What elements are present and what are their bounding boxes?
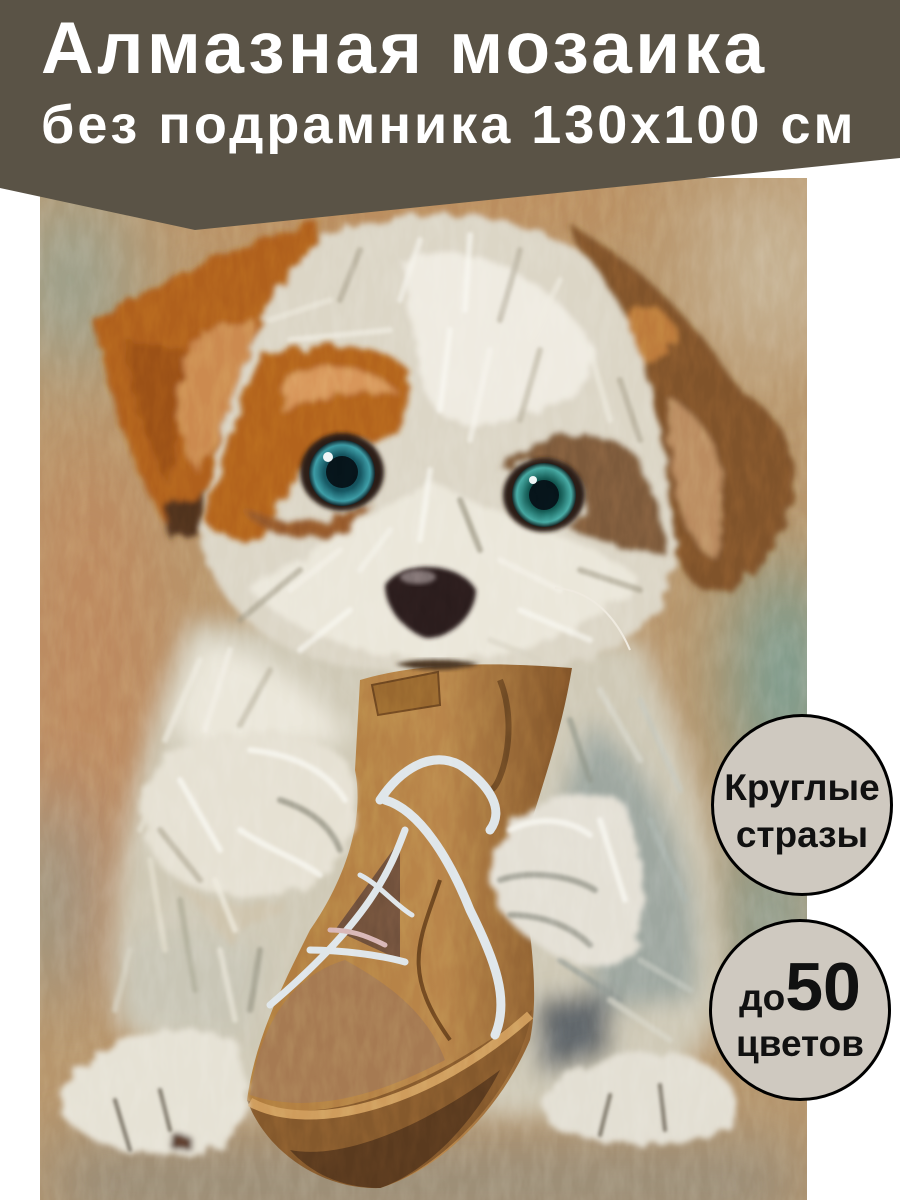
banner <box>0 0 900 230</box>
orange eye patch left <box>205 345 412 539</box>
rear paw toe lines <box>115 1085 665 1150</box>
body fur strokes <box>115 650 690 1040</box>
badge: round rhinestones <box>711 714 893 896</box>
left rear paw <box>62 1030 247 1156</box>
shoelaces <box>270 760 501 1035</box>
puppy head <box>200 214 676 675</box>
left front paw <box>136 744 360 900</box>
left eye <box>300 433 384 511</box>
badge: round rhinestones: стразы <box>736 814 868 855</box>
canvas texture overlay <box>40 178 807 1200</box>
left paw fur strokes <box>160 750 345 930</box>
head fur strokes <box>240 235 640 660</box>
nose <box>385 567 476 638</box>
title line 1: Алмазная мозаика <box>41 8 767 89</box>
right paw fur strokes <box>500 820 625 945</box>
right rear paw <box>540 1052 739 1144</box>
mouth shadow <box>395 660 480 670</box>
whisker <box>602 608 631 650</box>
puppy body <box>113 620 725 1120</box>
boot <box>247 664 572 1188</box>
title line 2: без подрамника 130х100 см <box>41 95 856 155</box>
badge: up to 50 colours <box>709 919 891 1101</box>
badge: round rhinestones: Круглые <box>724 767 880 808</box>
right eye <box>503 458 585 532</box>
badge: up to 50 colours: цветов <box>736 1023 864 1064</box>
right ear <box>570 225 796 590</box>
painting background <box>10 165 840 1200</box>
brown eye patch right <box>500 435 666 555</box>
badge: up to 50 colours: до50 <box>739 949 861 1025</box>
left ear <box>95 222 320 538</box>
right front paw <box>492 792 644 966</box>
